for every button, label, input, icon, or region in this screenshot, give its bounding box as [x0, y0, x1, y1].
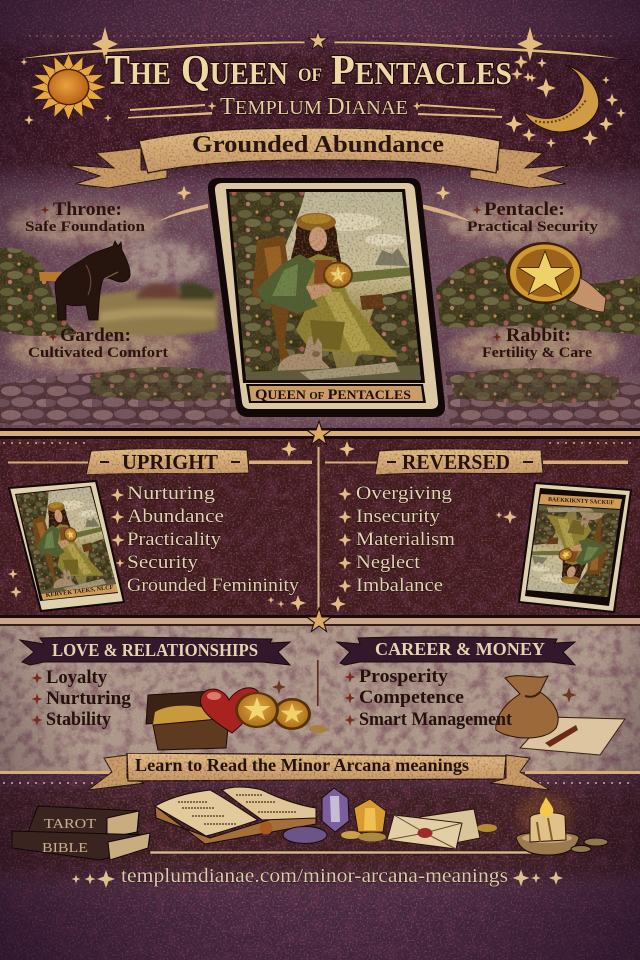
title: PENTACLES — [331, 48, 512, 94]
divider: centre vertical line — [318, 447, 320, 610]
panel: right pentacle scene — [436, 242, 640, 335]
icon: crescent moon — [505, 65, 626, 148]
labels: rabbit: Rabbit: — [506, 325, 571, 346]
list: career — [344, 666, 513, 730]
horse — [39, 241, 130, 320]
icon: gemstones — [283, 788, 386, 844]
hand — [568, 278, 606, 312]
heading: career and money: CAREER & MONEY — [375, 639, 545, 659]
panel: main tarot card — [208, 178, 445, 417]
list: reversed meanings: Materialism — [356, 529, 455, 550]
banner: grounded abundance — [67, 128, 570, 188]
list: upright meanings: Grounded Femininity — [127, 575, 300, 596]
heading: reversed — [325, 441, 628, 475]
heading: love and relationships: LOVE & RELATIONSHIPS — [52, 640, 258, 660]
banner: learn to read — [0, 753, 640, 790]
subtitle with rules — [128, 94, 502, 120]
list: upright meanings: Nurturing — [127, 483, 216, 504]
list: upright meanings: Security — [127, 552, 199, 573]
list: upright meanings: Abundance — [127, 506, 224, 527]
list: love: Loyalty — [46, 667, 107, 688]
heading: career and money — [337, 637, 575, 665]
list: reversed meanings: Insecurity — [356, 506, 441, 527]
top ornamental rule — [10, 27, 630, 61]
card illustration — [229, 192, 421, 380]
icon: sealed envelope — [387, 809, 497, 849]
sparkles and arcs near card — [157, 186, 472, 222]
labels: pentacle — [467, 199, 599, 235]
small reversed card — [513, 483, 633, 612]
small card art — [16, 487, 116, 594]
labels: pentacle: Practical Security — [467, 219, 599, 235]
list: career: Prosperity — [359, 666, 449, 687]
labels: throne — [25, 199, 146, 235]
banner: learn to read: Learn to Read the Minor Arcana meanings — [135, 755, 469, 775]
divider: upper star rule — [0, 421, 640, 445]
icon: tarot and bible books: BIBLE — [42, 841, 88, 856]
reversed card art — [527, 505, 620, 597]
list: love: Stability — [46, 709, 111, 730]
labels: throne: Safe Foundation — [25, 219, 146, 235]
labels: garden — [28, 325, 168, 361]
banner: grounded abundance: Grounded Abundance — [192, 132, 444, 158]
footer url — [72, 865, 563, 888]
labels: pentacle: Pentacle: — [484, 199, 565, 220]
labels: throne: Throne: — [53, 199, 122, 220]
heading: reversed: REVERSED — [402, 450, 510, 474]
heading: upright: UPRIGHT — [122, 450, 218, 474]
labels: garden: Cultivated Comfort — [28, 345, 168, 361]
footer url: templumdianae.com/minor-arcana-meanings — [121, 865, 508, 887]
labels: garden: Garden: — [60, 325, 131, 346]
shelf line — [150, 851, 532, 854]
subtitle with rules: TEMPLUM DIANAE — [220, 94, 408, 120]
icon: open book — [155, 787, 316, 844]
panel: ground stones — [0, 367, 640, 425]
panel: left garden scene — [0, 241, 218, 336]
list: reversed meanings — [356, 483, 455, 596]
bullets: reversed — [330, 487, 517, 612]
card caption: QUEEN OF PENTACLES — [255, 387, 411, 403]
list: love — [32, 667, 131, 730]
small upright card — [9, 481, 124, 611]
divider: love and career — [317, 660, 319, 706]
list: reversed meanings: Neglect — [356, 552, 421, 573]
icon: tarot and bible books: TAROT — [44, 817, 97, 832]
icon: money bag and scroll — [496, 676, 625, 755]
heading: love and relationships — [20, 637, 290, 665]
icon: pentacle coin — [506, 242, 582, 304]
list: upright meanings — [127, 483, 300, 596]
list: reversed meanings: Imbalance — [356, 575, 443, 596]
icon: tarot and bible books — [12, 806, 150, 860]
landscape — [95, 283, 218, 336]
garden flowers left — [0, 248, 80, 336]
small card caption: KERVEK TAEKS, NLCF — [46, 585, 114, 599]
reversed card caption: BAEKKIKNTY SACKUF — [548, 497, 614, 506]
sparkles: title right — [20, 55, 547, 125]
title: OF — [298, 65, 322, 86]
list: love: Nurturing — [46, 688, 131, 709]
title: QUEEN — [181, 48, 288, 94]
list: career: Competence — [359, 687, 464, 708]
list: upright meanings: Practicality — [127, 529, 222, 550]
list: reversed meanings: Overgiving — [356, 483, 453, 504]
heading: upright — [8, 441, 312, 475]
bullets: upright — [8, 488, 306, 611]
list: career: Smart Management — [359, 709, 513, 730]
foliage behind coin — [436, 256, 640, 335]
labels: rabbit: Fertility & Care — [482, 345, 592, 361]
divider: lower star rule — [0, 608, 640, 632]
icon: sun — [30, 54, 107, 120]
icon: treasure chest, heart and coins — [146, 680, 327, 750]
labels: rabbit — [482, 325, 592, 361]
title: THE — [105, 48, 171, 94]
icon: candle — [516, 793, 608, 855]
title — [105, 48, 512, 94]
